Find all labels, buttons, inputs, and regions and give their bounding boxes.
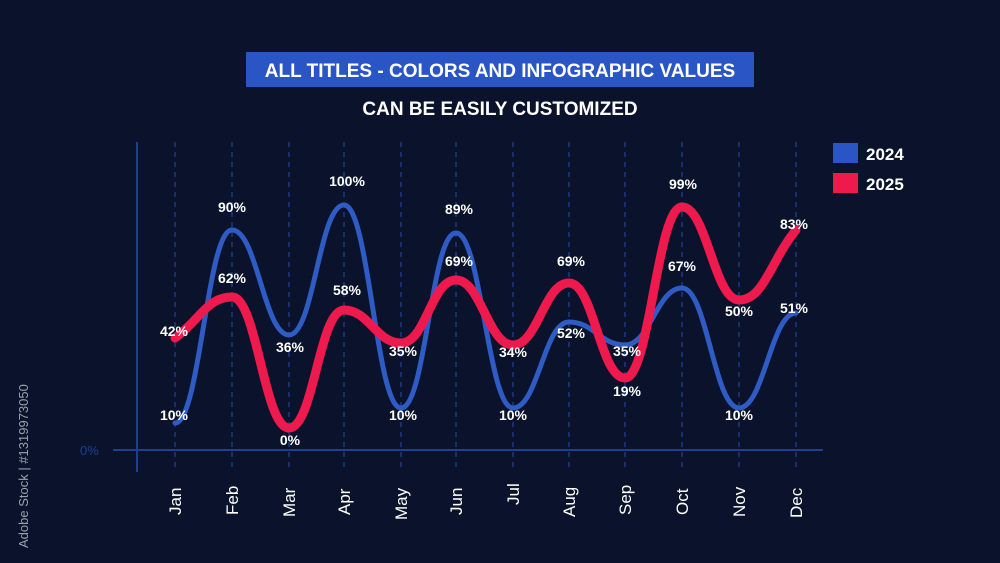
- legend: 2025: [866, 175, 904, 194]
- month labels: May: [392, 487, 411, 520]
- title: [246, 52, 754, 87]
- line: 2024: [175, 205, 796, 423]
- value labels: 83%: [780, 216, 809, 232]
- value labels: 89%: [445, 201, 474, 217]
- value labels: 62%: [218, 270, 247, 286]
- title: ALL TITLES - COLORS AND INFOGRAPHIC VALUES: [265, 61, 735, 82]
- month labels: Apr: [335, 488, 354, 515]
- value labels: [160, 173, 809, 448]
- value labels: 67%: [668, 258, 697, 274]
- month labels: Jul: [504, 483, 523, 505]
- value labels: 34%: [499, 344, 528, 360]
- value labels: 50%: [725, 303, 754, 319]
- value labels: 10%: [725, 407, 754, 423]
- month labels: Jun: [447, 488, 466, 515]
- month labels: Jan: [166, 488, 185, 515]
- legend: [833, 143, 904, 194]
- value labels: 10%: [499, 407, 528, 423]
- month labels: Oct: [673, 488, 692, 515]
- value labels: 35%: [389, 343, 418, 359]
- value labels: 52%: [557, 325, 586, 341]
- line: 2025: [175, 207, 796, 428]
- value labels: 42%: [160, 323, 189, 339]
- month labels: Dec: [787, 487, 806, 518]
- value labels: 10%: [389, 407, 418, 423]
- legend: 2024: [866, 145, 904, 164]
- side credit: Adobe Stock | #1319973050: [16, 384, 31, 548]
- month labels: [166, 483, 806, 520]
- value labels: 10%: [160, 407, 189, 423]
- month labels: Sep: [616, 485, 635, 515]
- subtitle: CAN BE EASILY CUSTOMIZED: [362, 99, 638, 120]
- value labels: 100%: [329, 173, 365, 189]
- value labels: 90%: [218, 199, 247, 215]
- value labels: 35%: [613, 343, 642, 359]
- value labels: 36%: [276, 339, 305, 355]
- value labels: 69%: [445, 253, 474, 269]
- value labels: 69%: [557, 253, 586, 269]
- month labels: Mar: [280, 487, 299, 517]
- value labels: 51%: [780, 300, 809, 316]
- month labels: Aug: [560, 487, 579, 517]
- axes: [113, 142, 823, 472]
- axis label 0%: 0%: [80, 443, 99, 458]
- value labels: 0%: [280, 432, 301, 448]
- month labels: Feb: [223, 486, 242, 515]
- value labels: 58%: [333, 282, 362, 298]
- value labels: 19%: [613, 383, 642, 399]
- month labels: Nov: [730, 486, 749, 517]
- value labels: 99%: [669, 176, 698, 192]
